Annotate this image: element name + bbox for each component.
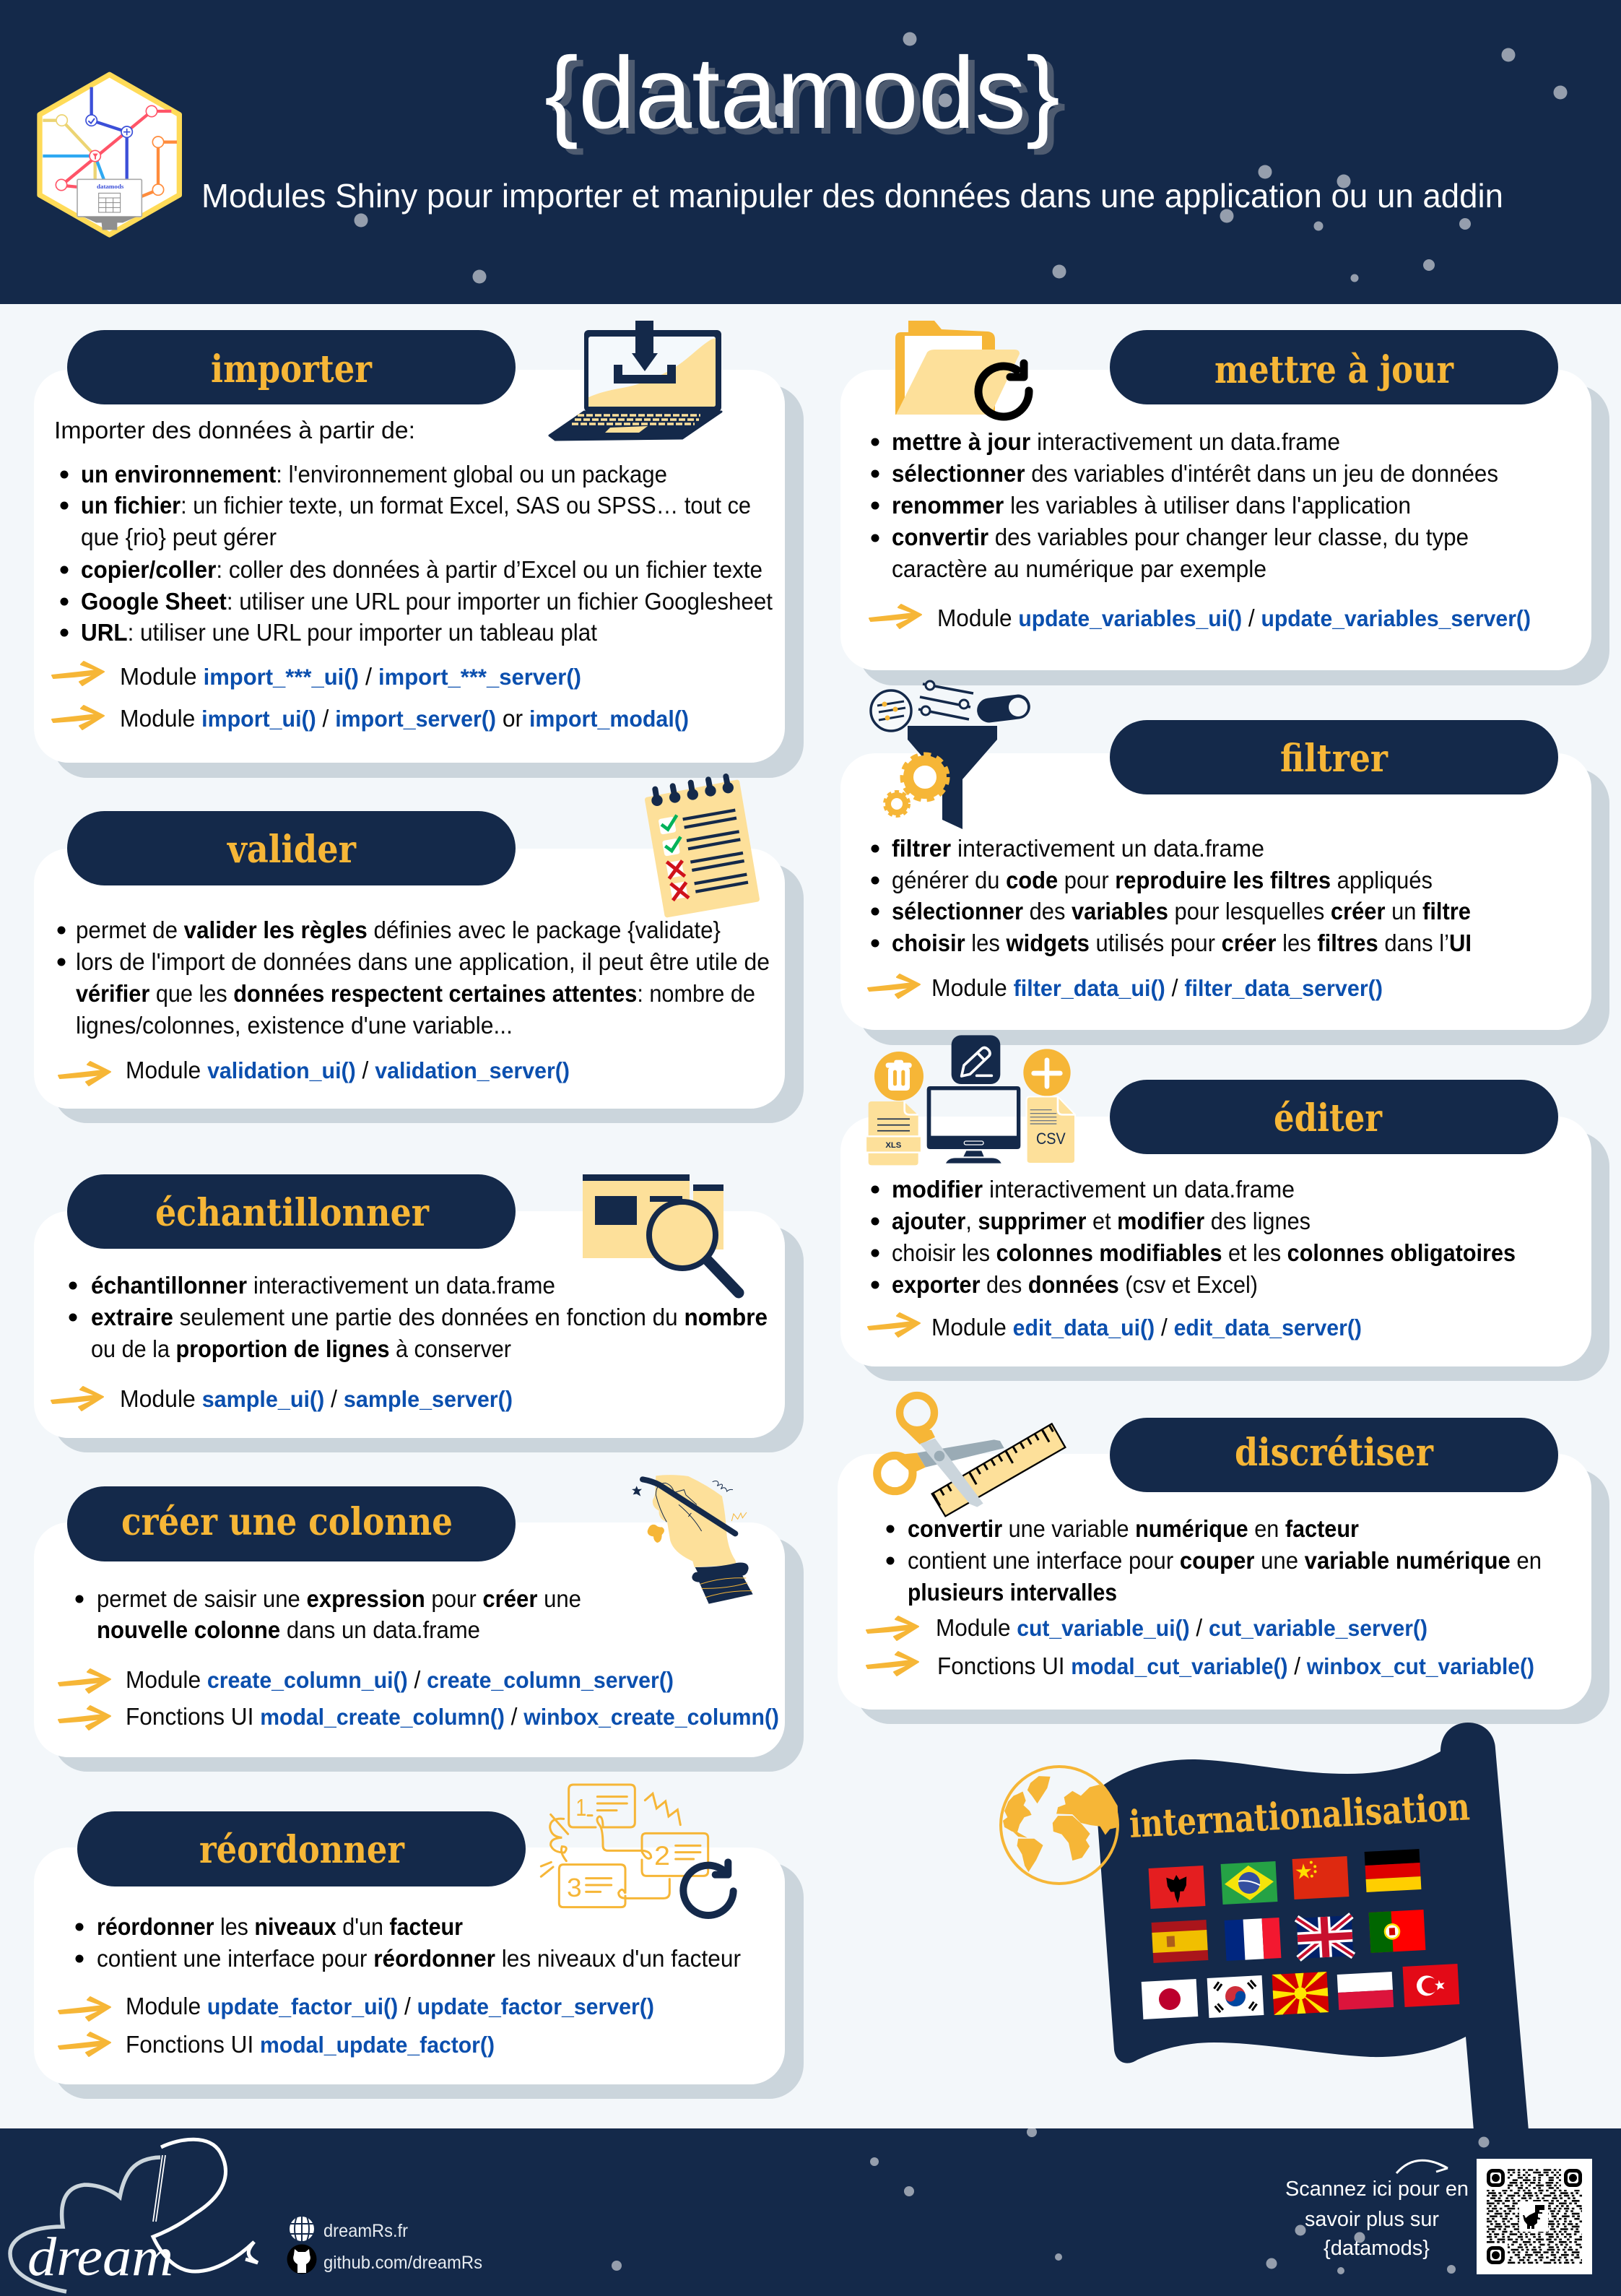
bullet list: mettre à jour: convertir des variables pour changer leur classe, du type bbox=[892, 524, 1469, 550]
subtitle: Modules Shiny pour importer et manipuler des données dans une application ou un addin bbox=[201, 177, 1503, 215]
heading: importer bbox=[67, 330, 516, 404]
arrow: towards QR code bbox=[1396, 2160, 1448, 2173]
icon: funnel with sliders and gears bbox=[871, 681, 1032, 829]
header band bbox=[0, 0, 1621, 304]
icon: scissors and ruler bbox=[877, 1395, 1065, 1516]
flag: Spain bbox=[1152, 1920, 1208, 1963]
module line: Module create_column_ui() / create_column_server() bbox=[126, 1666, 674, 1693]
panel: internationalisation flag bbox=[1001, 1723, 1529, 2131]
arrow bbox=[58, 2032, 110, 2056]
icon: reorder list: 2 bbox=[654, 1840, 670, 1871]
logo: dreamRs: dream bbox=[27, 2227, 173, 2287]
heading: importer: importer bbox=[211, 347, 373, 391]
text block: scan invitation bbox=[1285, 2178, 1469, 2260]
heading: internationalisation: internationalisation bbox=[1128, 1785, 1471, 1847]
flag: Portugal bbox=[1369, 1910, 1425, 1953]
icon: editing desktop with files: XLS bbox=[885, 1141, 902, 1150]
heading: échantillonner: échantillonner bbox=[155, 1191, 430, 1235]
arrow bbox=[58, 1997, 110, 2021]
flag: China bbox=[1292, 1856, 1349, 1899]
module line: Module edit_data_ui() / edit_data_server() bbox=[931, 1314, 1362, 1340]
bullet list: éditer: ajouter, supprimer et modifier des lignes bbox=[892, 1208, 1311, 1234]
flag: North Macedonia bbox=[1272, 1972, 1329, 2015]
QR code bbox=[1477, 2159, 1592, 2274]
arrow bbox=[868, 974, 920, 998]
icon: github bbox=[287, 2245, 316, 2274]
flag: Albania bbox=[1149, 1866, 1205, 1909]
module line: Module import_ui() / import_server() or import_modal() bbox=[120, 705, 689, 732]
flag: South Korea bbox=[1207, 1975, 1264, 2018]
heading: mettre à jour bbox=[1110, 330, 1558, 404]
bullet list: valider: lors de l'import de données dans une application, il peut être utile de bbox=[76, 948, 770, 975]
icon: reorder list bbox=[541, 1785, 734, 1915]
heading: valider: valider bbox=[227, 828, 357, 872]
bullet list: créer une colonne: permet de saisir une expression pour créer une bbox=[97, 1585, 581, 1612]
panel: filtrer bbox=[840, 681, 1609, 1045]
arrow bbox=[866, 1652, 918, 1676]
bullet list: filtrer: filtrer interactivement un data.frame bbox=[892, 835, 1264, 862]
flag shape bbox=[1095, 1723, 1529, 2131]
bullet list: éditer: modifier interactivement un data.frame bbox=[892, 1176, 1295, 1203]
module line: Module update_factor_ui() / update_factor_server() bbox=[126, 1993, 654, 2019]
bullet list: importer: URL: utiliser une URL pour importer un tableau plat bbox=[81, 619, 597, 646]
panel: éditer bbox=[840, 1035, 1609, 1381]
bullet list: filtrer: sélectionner des variables pour lesquelles créer un filtre bbox=[892, 898, 1471, 924]
text block: scan invitation: {datamods} bbox=[1324, 2237, 1430, 2260]
bullet list: filtrer: choisir les widgets utilisés pour créer les filtres dans l’UI bbox=[892, 930, 1472, 956]
bullet list: importer: copier/coller: coller des données à partir d’Excel ou un fichier texte bbox=[81, 556, 762, 583]
bullet list: échantillonner: extraire seulement une partie des données en fonction du nombre bbox=[91, 1304, 768, 1330]
flag: United Kingdom bbox=[1297, 1915, 1353, 1959]
flag: Turkey bbox=[1403, 1964, 1459, 2007]
icon: globe bbox=[1001, 1767, 1118, 1884]
bullet list: valider: lignes/colonnes, existence d'une variable... bbox=[76, 1012, 513, 1039]
title: {datamods} bbox=[544, 35, 1060, 150]
flag: Brazil bbox=[1221, 1861, 1277, 1905]
module line: Module import_***_ui() / import_***_server() bbox=[120, 663, 581, 690]
bullet list: valider: permet de valider les règles définies avec le package {validate} bbox=[76, 917, 721, 943]
logo: dreamRs bbox=[10, 2139, 258, 2292]
icon: folder refresh bbox=[895, 321, 1029, 417]
text block: scan invitation: Scannez ici pour en bbox=[1285, 2178, 1469, 2201]
bullet list: importer: un fichier: un fichier texte, un format Excel, SAS ou SPSS… tout ce bbox=[81, 492, 751, 519]
arrow bbox=[868, 1313, 920, 1337]
icon: reorder list: 1 bbox=[575, 1795, 586, 1821]
bullet list: discrétiser: contient une interface pour couper une variable numérique en bbox=[908, 1547, 1542, 1574]
bullet list: discrétiser bbox=[887, 1515, 1542, 1606]
bullet list: mettre à jour: caractère au numérique par exemple bbox=[892, 555, 1266, 582]
bullet list: éditer: choisir les colonnes modifiables et les colonnes obligatoires bbox=[892, 1239, 1516, 1266]
bullet list: mettre à jour: sélectionner des variables d'intérêt dans un jeu de données bbox=[892, 460, 1498, 487]
icon: reorder list: 3 bbox=[567, 1873, 582, 1902]
bullet list: mettre à jour bbox=[871, 428, 1498, 582]
bullet list: mettre à jour: mettre à jour interactivement un data.frame bbox=[892, 428, 1340, 455]
arrow bbox=[866, 1616, 918, 1640]
bullet list: réordonner: contient une interface pour réordonner les niveaux d'un facteur bbox=[97, 1945, 741, 1972]
arrow bbox=[51, 1387, 103, 1411]
bullet list: réordonner bbox=[75, 1913, 741, 1972]
heading: réordonner: réordonner bbox=[199, 1828, 405, 1872]
bullet list: discrétiser: plusieurs intervalles bbox=[908, 1579, 1117, 1606]
link: website: dreamRs.fr bbox=[323, 2221, 408, 2241]
bullet list: filtrer bbox=[871, 835, 1472, 956]
bullet list: mettre à jour: renommer les variables à utiliser dans l'application bbox=[892, 492, 1411, 519]
functions line: Fonctions UI modal_update_factor() bbox=[126, 2031, 495, 2058]
bullet list: réordonner: réordonner les niveaux d'un facteur bbox=[97, 1913, 463, 1940]
heading: discrétiser bbox=[1110, 1418, 1558, 1492]
icon: windows and magnifier bbox=[583, 1174, 739, 1293]
module line: Module sample_ui() / sample_server() bbox=[120, 1385, 513, 1412]
arrow bbox=[52, 706, 104, 729]
icon: hand writing bbox=[632, 1475, 753, 1604]
panel: discrétiser bbox=[838, 1395, 1609, 1724]
flag: Japan bbox=[1142, 1979, 1198, 2019]
text block: importer intro: Importer des données à partir de: bbox=[54, 417, 415, 443]
bullet list: importer bbox=[61, 461, 773, 646]
flag: France bbox=[1225, 1918, 1281, 1961]
flag: Poland bbox=[1337, 1972, 1394, 2010]
bullet list: éditer: exporter des données (csv et Excel) bbox=[892, 1271, 1258, 1298]
icon: editing desktop with files bbox=[866, 1035, 1075, 1165]
icon: web globe bbox=[290, 2217, 314, 2241]
bullet list: échantillonner: ou de la proportion de lignes à conserver bbox=[91, 1335, 511, 1362]
panel: créer une colonne bbox=[34, 1475, 804, 1772]
link: github: github.com/dreamRs bbox=[323, 2253, 482, 2273]
bullet list: valider bbox=[58, 917, 770, 1039]
flag: Germany bbox=[1365, 1849, 1421, 1892]
bullet list: discrétiser: convertir une variable numérique en facteur bbox=[908, 1515, 1359, 1542]
panel: réordonner bbox=[34, 1785, 804, 2099]
bullet list: éditer bbox=[871, 1176, 1516, 1298]
bullet list: créer une colonne: nouvelle colonne dans un data.frame bbox=[97, 1616, 480, 1643]
heading: créer une colonne bbox=[67, 1486, 516, 1561]
functions line: Fonctions UI modal_cut_variable() / winbox_cut_variable() bbox=[937, 1652, 1534, 1679]
icon: checklist notebook bbox=[648, 776, 757, 915]
panel: mettre à jour bbox=[840, 321, 1609, 685]
functions line: Fonctions UI modal_create_column() / winbox_create_column() bbox=[126, 1703, 779, 1730]
heading: mettre à jour: mettre à jour bbox=[1214, 348, 1454, 392]
panel: échantillonner bbox=[34, 1174, 804, 1452]
heading: éditer bbox=[1110, 1080, 1558, 1154]
footer band bbox=[0, 2127, 1621, 2296]
bullet list: importer: Google Sheet: utiliser une URL pour importer un fichier Googlesheet bbox=[81, 588, 773, 615]
icon: editing desktop with files: CSV bbox=[1036, 1130, 1066, 1148]
bullet list: échantillonner: échantillonner interactivement un data.frame bbox=[91, 1272, 555, 1299]
title: {datamods} bbox=[551, 41, 1066, 155]
panel: importer bbox=[34, 321, 804, 778]
icon: datamods hex logo bbox=[40, 74, 179, 235]
bullet list: filtrer: générer du code pour reproduire les filtres appliqués bbox=[892, 867, 1433, 893]
heading: filtrer: filtrer bbox=[1280, 737, 1389, 781]
module line: Module update_variables_ui() / update_variables_server() bbox=[937, 605, 1531, 631]
heading: éditer: éditer bbox=[1274, 1096, 1383, 1140]
arrow bbox=[58, 1062, 110, 1086]
arrow bbox=[58, 1669, 110, 1693]
heading: filtrer bbox=[1110, 720, 1558, 794]
icon: datamods hex logo: datamods bbox=[97, 183, 124, 190]
bullet list: échantillonner bbox=[69, 1272, 768, 1362]
arrow bbox=[869, 605, 921, 628]
bullet list: importer: un environnement: l'environnement global ou un package bbox=[81, 461, 667, 488]
arrow bbox=[52, 662, 104, 685]
text block: scan invitation: savoir plus sur bbox=[1305, 2208, 1439, 2231]
bullet list: valider: vérifier que les données respectent certaines attentes: nombre de bbox=[76, 980, 755, 1007]
heading: discrétiser: discrétiser bbox=[1235, 1431, 1434, 1475]
bullet list: importer: que {rio} peut gérer bbox=[81, 524, 277, 550]
heading: réordonner bbox=[77, 1811, 526, 1886]
module line: Module validation_ui() / validation_server() bbox=[126, 1057, 570, 1083]
bullet list: créer une colonne bbox=[75, 1585, 581, 1643]
heading: créer une colonne: créer une colonne bbox=[121, 1500, 453, 1544]
module line: Module cut_variable_ui() / cut_variable_server() bbox=[936, 1614, 1427, 1641]
arrow bbox=[58, 1706, 110, 1730]
heading: échantillonner bbox=[67, 1174, 516, 1249]
heading: valider bbox=[67, 811, 516, 885]
module line: Module filter_data_ui() / filter_data_server() bbox=[931, 974, 1383, 1001]
icon: laptop download bbox=[549, 321, 721, 440]
panel: valider bbox=[34, 776, 804, 1123]
